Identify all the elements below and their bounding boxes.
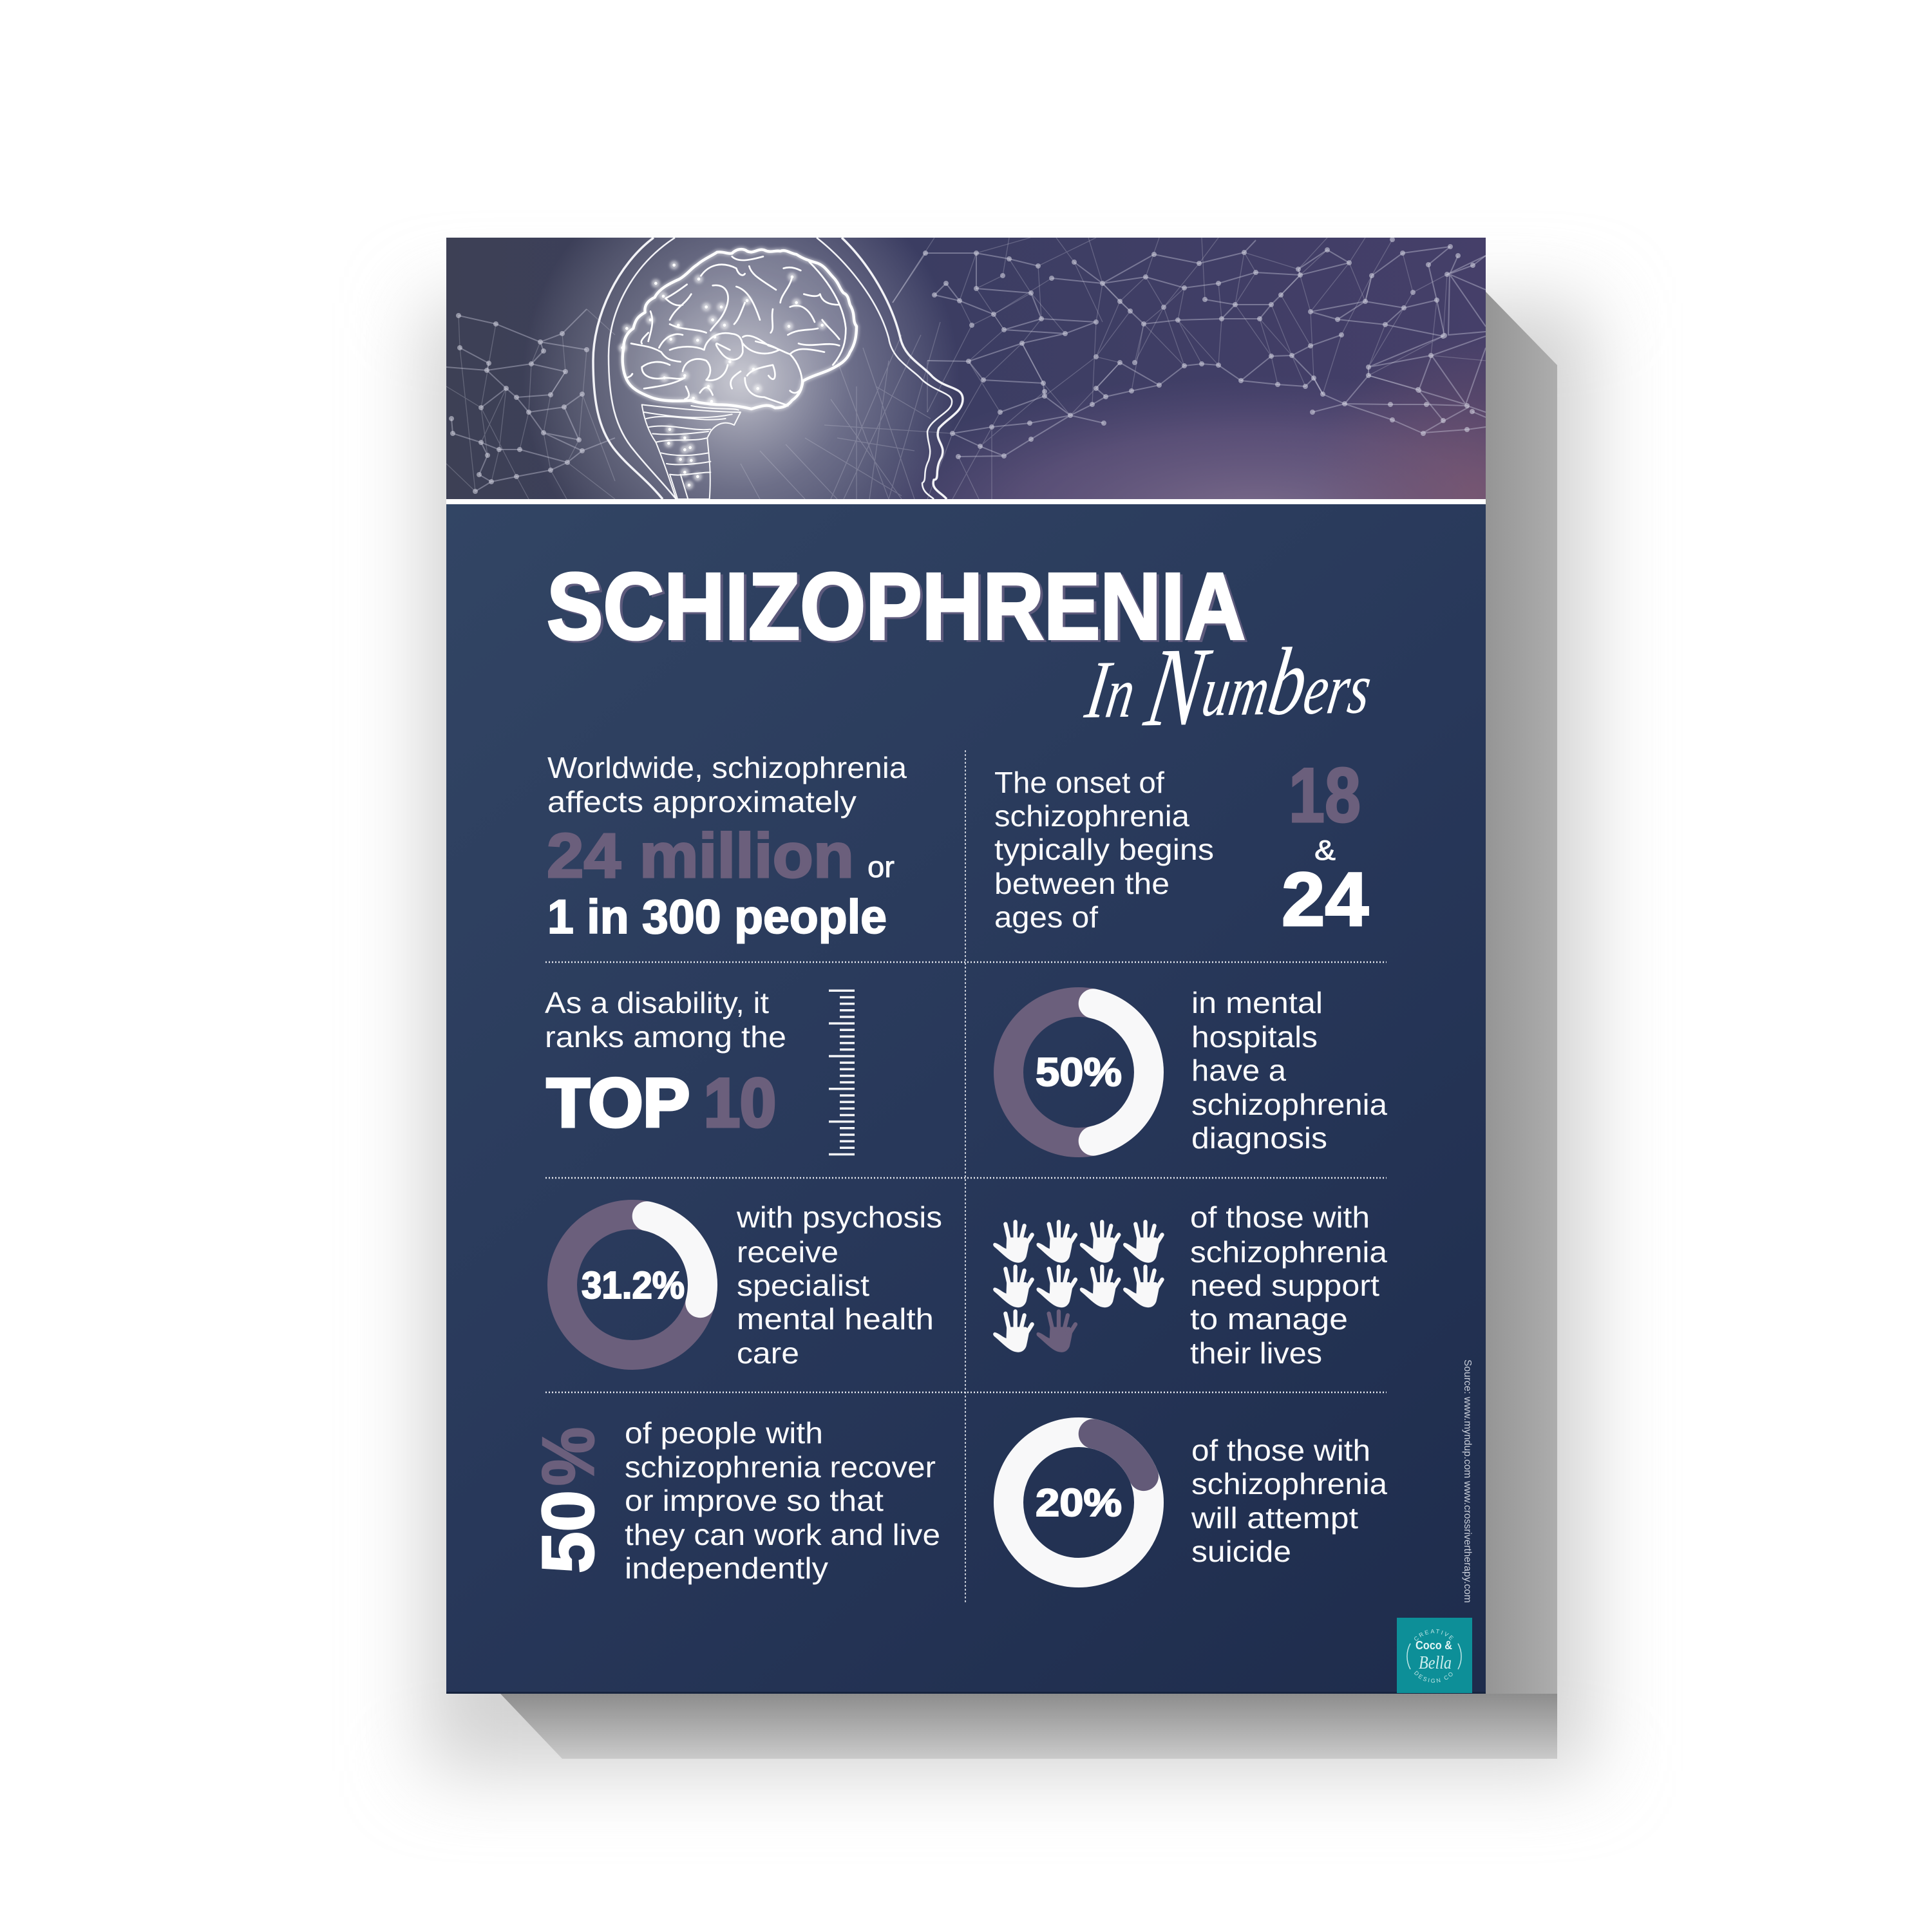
donut chart: 31.2%: 31.2% [582,1264,685,1307]
panel: 24 million: 1 in 300 people [547,890,887,943]
icon: hands, nine of ten white [993,1222,1162,1352]
panel: 50% recover: of people with [625,1416,823,1450]
panel: 31.2% with psychosis [562,1200,942,1370]
panel: 24 million: 24 million [547,820,854,891]
panel: need support: schizophrenia [1190,1235,1387,1269]
panel: 50% recover: independently [625,1551,828,1585]
panel: 50% recover: or improve so that [625,1484,884,1517]
panel: 20% attempt suicide: of those with [1191,1434,1370,1467]
banner: brain and network [446,238,1486,499]
panel: 50% in mental hospitals: hospitals [1191,1020,1318,1054]
panel: onset ages: schizophrenia [994,799,1189,833]
donut chart: 20% [1009,1432,1149,1573]
panel: onset ages: 24 [1282,857,1368,942]
network nodes [451,240,1473,491]
donut chart: 20%: 20% [1036,1481,1122,1524]
source note: Source: www.myndup.com www.crossrivertherapy.com [1462,1359,1473,1603]
icon: ruler [829,990,855,1154]
panel: 31.2% with psychosis: mental health [737,1302,934,1336]
subtitle: In Numbers: um [1197,650,1275,732]
panel: 50% in mental hospitals: schizophrenia [1191,1088,1387,1121]
panel: 20% attempt suicide: suicide [1191,1535,1291,1568]
rotated 50% figure: % [527,1427,609,1486]
panel: 24 million [547,751,907,943]
panel: 31.2% with psychosis: receive [737,1235,838,1269]
brain [623,249,857,499]
panel: 20% attempt suicide: will attempt [1191,1501,1358,1535]
panel: onset ages: ages of [994,900,1098,934]
panel: 31.2% with psychosis: specialist [737,1269,869,1302]
logo: Coco and Bella [1397,1618,1472,1693]
panel: top 10 disability: 10 [704,1064,776,1141]
rotated 50% figure [527,1427,609,1573]
panel: need support [993,1200,1387,1370]
dotted grid dividers [545,750,1387,1604]
logo: Coco and Bella: DESIGN CO [1414,1671,1453,1683]
donut chart: 31.2% [562,1215,703,1355]
logo: Coco and Bella: CREATIVE [1414,1629,1454,1641]
panel: need support: need support [1190,1269,1379,1302]
panel: 24 million: Worldwide, schizophrenia [547,751,907,784]
rotated 50% figure: 50 [527,1490,609,1573]
panel: 50% in mental hospitals [1009,986,1387,1155]
panel: 50% in mental hospitals: in mental [1191,986,1323,1019]
panel: 24 million: or [867,850,895,884]
panel: 31.2% with psychosis: with psychosis [736,1200,942,1234]
panel: need support: their lives [1190,1336,1322,1370]
panel: onset ages: 18 [1289,752,1361,838]
panel: onset ages: typically begins [994,833,1214,866]
subtitle: In Numbers: N [1137,625,1218,750]
panel: onset ages: The onset of [994,766,1164,799]
white divider band [446,500,1486,504]
panel: 20% attempt suicide [1009,1432,1387,1573]
title: SCHIZOPHRENIA [547,554,1245,659]
panel: top 10 disability: TOP [547,1064,690,1141]
panel: 24 million: affects approximately [547,785,857,819]
panel: 50% in mental hospitals: diagnosis [1191,1121,1327,1155]
poster panel [446,238,1486,1694]
panel: top 10 disability: ranks among the [545,1020,786,1054]
logo: Coco and Bella: Coco & [1416,1639,1452,1652]
panel: need support: of those with [1190,1200,1370,1234]
panel: top 10 disability [545,986,855,1154]
subtitle: In Numbers: bers [1262,627,1399,735]
panel: top 10 disability: As a disability, it [545,986,769,1019]
panel: 20% attempt suicide: schizophrenia [1191,1467,1387,1501]
head outline [593,238,963,499]
donut chart: 50% [1009,1002,1149,1142]
panel: onset ages: & [1314,835,1336,866]
panel: 50% recover: they can work and live [625,1518,940,1551]
subtitle: In Numbers: In [1081,643,1150,735]
donut chart: 50%: 50% [1036,1050,1122,1095]
panel: 31.2% with psychosis: care [737,1336,799,1370]
title: SCHIZOPHRENIA [549,556,1248,661]
panel: onset ages [994,752,1368,942]
panel: onset ages: between the [994,867,1170,900]
network lines [446,240,1486,491]
poster drop shadow [500,292,1557,1759]
panel: 50% recover [527,1416,940,1585]
panel: need support: to manage [1190,1302,1348,1336]
panel: 50% in mental hospitals: have a [1191,1054,1286,1087]
logo: Coco and Bella: Bella [1419,1653,1452,1673]
panel: 50% recover: schizophrenia recover [625,1450,936,1484]
